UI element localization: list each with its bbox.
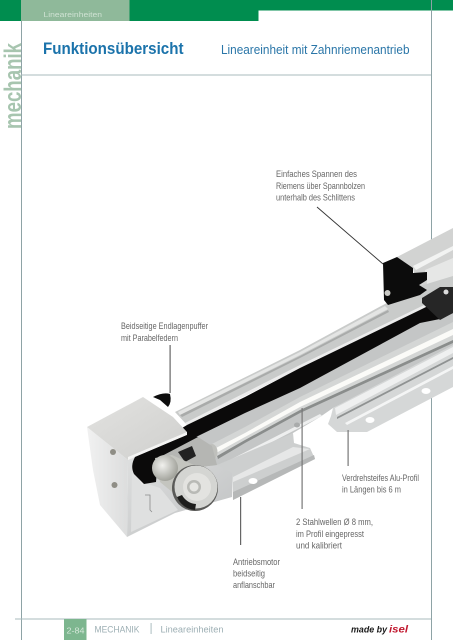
callout: end buffers: mit Parabelfedern	[121, 333, 178, 344]
footer section text	[94, 623, 224, 634]
footer logo: made by isel: made by	[351, 624, 388, 634]
callout: steel shafts: und kalibriert	[296, 540, 342, 552]
profile strip highlight	[222, 414, 322, 467]
footer logo: made by isel	[351, 624, 408, 636]
callout: motor mount	[233, 497, 280, 591]
callout: torsion-resistant profile: Verdrehsteifes Alu-Profil	[342, 473, 419, 484]
black tension end cap	[383, 257, 427, 305]
profile body backing	[187, 295, 453, 468]
small nub under shaft	[294, 422, 300, 428]
header tab: section name: Lineareinheiten	[44, 10, 102, 19]
callout: torsion-resistant profile	[342, 430, 419, 496]
end block	[87, 397, 232, 537]
belt wrap on pulley	[132, 435, 198, 484]
toothed pulley	[152, 455, 205, 505]
end buffer with parabolic springs	[153, 393, 171, 407]
footer page number: 2-84	[66, 626, 85, 636]
front mounting flange	[217, 433, 315, 500]
callout: steel shafts: im Profil eingepresst	[296, 529, 364, 540]
footer page number	[64, 619, 86, 640]
callout: motor mount: anflanschbar	[233, 580, 275, 591]
title: Funktionsübersicht	[43, 40, 184, 58]
bearing	[172, 465, 218, 511]
pocket behind pulley	[157, 437, 217, 470]
subtitle: Lineareinheit mit Zahnriemenantrieb	[221, 43, 410, 57]
callout: steel shafts	[296, 408, 373, 552]
callout: belt tensioning	[276, 169, 383, 264]
callout: belt tensioning: Riemens über Spannbolzen	[276, 181, 365, 192]
header tab: section name	[21, 0, 130, 21]
callout: motor mount: Antriebsmotor	[233, 557, 280, 568]
carriage	[422, 287, 453, 320]
callout: belt tensioning: Einfaches Spannen des	[276, 169, 357, 180]
back profile section	[397, 228, 453, 300]
callout: torsion-resistant profile: in Längen bis 6 m	[342, 484, 401, 496]
footer logo: made by isel: isel	[389, 624, 408, 636]
footer section text: Lineareinheiten	[160, 624, 224, 634]
mounting flange right	[328, 345, 453, 432]
toothed belt	[132, 296, 453, 482]
callout: motor mount: beidseitig	[233, 568, 265, 580]
dark parts behind pulley	[178, 446, 196, 462]
callout: end buffers	[121, 321, 208, 393]
footer section text: MECHANIK	[94, 624, 140, 634]
header green band	[0, 0, 453, 21]
callout: belt tensioning: unterhalb des Schlittens	[276, 192, 355, 204]
callout: end buffers: Beidseitige Endlagenpuffer	[121, 321, 208, 332]
upper rail	[175, 276, 453, 425]
product image: linear unit with toothed belt	[87, 228, 453, 537]
side label: mechanik: mechanik	[0, 42, 27, 129]
steel shaft	[206, 322, 453, 460]
callout: steel shafts: 2 Stahlwellen Ø 8 mm,	[296, 517, 373, 528]
